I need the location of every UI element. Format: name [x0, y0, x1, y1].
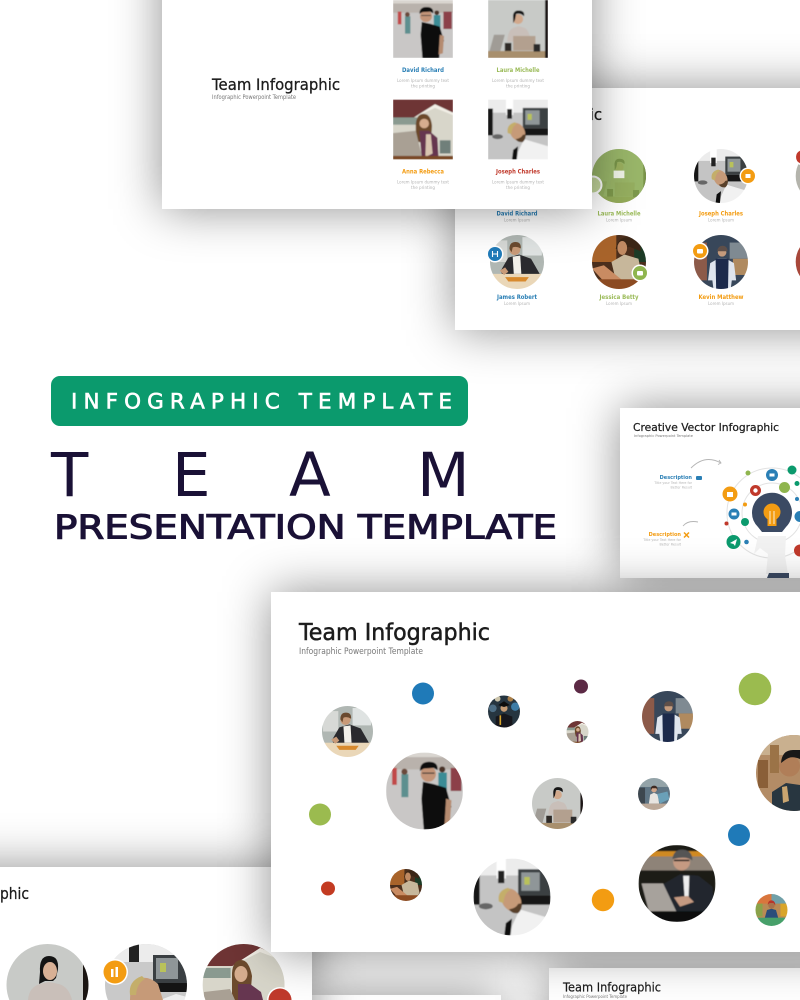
portrait: Anna — [203, 944, 285, 1000]
icon cluster — [722, 466, 800, 556]
dot: orange — [592, 889, 614, 911]
caption: Lorem Ipsum dummy text — [397, 180, 449, 186]
slide title: Creative Vector Infographic — [633, 421, 779, 434]
name: Laura Michelle: Laura Michelle — [496, 67, 540, 74]
slide background — [162, 0, 592, 209]
bubble: girl — [756, 894, 788, 926]
portrait: David — [490, 149, 544, 203]
hand holding bulb — [754, 536, 788, 574]
badge: green — [632, 264, 648, 282]
name: Jessica Betty: Jessica Betty — [599, 294, 638, 301]
bubble: Joseph — [474, 858, 550, 936]
caption: Lorem Ipsum — [708, 218, 734, 224]
bubble: small woman — [638, 778, 670, 810]
bubble: Jessica small — [390, 869, 422, 901]
slide subtitle: Infographic Powerpoint Template — [212, 95, 296, 101]
portrait: partial right top — [796, 161, 800, 191]
portrait: Joseph — [105, 944, 187, 1000]
bubble: businessman — [638, 845, 716, 922]
photo: David — [393, 0, 453, 58]
caption: Lorem Ipsum dummy text — [492, 180, 544, 186]
badge text: INFOGRAPHIC TEMPLATE — [71, 390, 452, 414]
dot: red — [321, 882, 335, 896]
badge: orange — [692, 242, 708, 260]
caption: the printing — [411, 84, 435, 90]
caption: Lorem Ipsum dummy text — [397, 78, 449, 84]
slide title: Team Infographic — [562, 980, 661, 994]
description: blue: Better Result — [670, 486, 693, 490]
slide background — [0, 867, 312, 1000]
arrow: lower curved — [683, 522, 698, 526]
bubble: Kevin — [642, 691, 693, 742]
slide background — [620, 408, 800, 578]
name: David Richard: David Richard — [496, 210, 538, 218]
caption: Lorem Ipsum — [504, 218, 530, 224]
dot: blue — [728, 824, 750, 846]
badge: red — [794, 149, 800, 165]
caption: the printing — [506, 84, 530, 90]
badge background — [51, 376, 468, 426]
caption: Lorem Ipsum — [606, 301, 632, 307]
portrait: Kevin — [694, 235, 748, 289]
bubble: Anna small — [566, 721, 588, 743]
caption: Lorem Ipsum — [504, 301, 530, 307]
name: Kevin Matthew: Kevin Matthew — [698, 294, 744, 301]
badge: orange — [740, 168, 756, 184]
caption: the printing — [411, 185, 435, 191]
badge: orange — [102, 959, 128, 985]
caption — [492, 180, 544, 191]
arrow: upper curved — [691, 459, 721, 468]
slide subtitle: Infographic Powerpoint Template — [634, 434, 694, 438]
description: orange: Description — [649, 532, 681, 538]
light bulb badge — [752, 493, 792, 532]
bubble: David — [386, 752, 463, 830]
dot: blue — [412, 682, 434, 704]
portrait: Laura — [6, 944, 89, 1000]
name: Joseph Charles: Joseph Charles — [698, 210, 743, 218]
sleeve — [767, 573, 789, 578]
name: Anna Rebecca: Anna Rebecca — [402, 168, 444, 176]
photo: Joseph — [488, 100, 548, 160]
portrait: Laura green tint — [592, 149, 646, 203]
name: Joseph Charles: Joseph Charles — [495, 168, 540, 176]
caption: Lorem Ipsum — [708, 301, 734, 307]
panel: bottom left slide — [0, 867, 312, 1000]
description: blue — [653, 475, 702, 490]
slide background — [271, 592, 800, 952]
name: Laura Michelle: Laura Michelle — [598, 210, 640, 218]
portrait: Joseph — [694, 149, 748, 203]
caption — [492, 78, 544, 90]
description: blue: Description — [660, 475, 692, 481]
caption: Lorem Ipsum dummy text — [492, 78, 544, 84]
bubble: James — [322, 706, 373, 757]
badge: red — [267, 987, 293, 1000]
dot: green — [309, 804, 331, 826]
portrait: partial right bottom — [796, 247, 800, 276]
name: David Richard: David Richard — [402, 67, 444, 74]
portrait: Jessica — [592, 235, 646, 289]
description: orange: Title your Text Here for — [642, 538, 682, 542]
panel: bottom centre slide — [312, 995, 501, 1000]
panel: creative vector infographic slide — [620, 408, 800, 578]
bubble: right man — [756, 735, 800, 811]
badge: green — [584, 176, 602, 194]
slide subtitle: Infographic Powerpoint Template — [299, 647, 423, 657]
description: orange: Better Result — [660, 542, 682, 546]
panel: main team bubble slide — [271, 592, 800, 952]
slide subtitle: Infographic Powerpoint Template — [563, 994, 627, 1000]
photo: Laura — [488, 0, 548, 58]
dot: large green — [739, 673, 771, 705]
panel: bottom right slide — [549, 968, 800, 1000]
caption: Lorem Ipsum — [606, 218, 632, 224]
orbit rings — [727, 468, 800, 558]
dot: plum — [574, 680, 588, 694]
portrait: James — [490, 235, 544, 289]
heading badge — [51, 376, 468, 426]
slide background — [549, 968, 800, 1000]
panel: team grid slide — [455, 88, 800, 330]
name: James Robert: James Robert — [496, 294, 537, 301]
bubble: Laura — [532, 778, 583, 829]
description: orange — [642, 532, 689, 546]
slide title: Team Infographic — [211, 75, 340, 94]
photo: Anna — [393, 100, 453, 160]
caption: the printing — [506, 185, 530, 191]
bubble: graduate — [488, 696, 520, 728]
heading: TEAM: TEAM — [50, 440, 470, 511]
caption — [397, 78, 449, 90]
panel: team profile slide — [162, 0, 592, 209]
heading: Presentation Template: PRESENTATION TEMPLATE — [54, 508, 557, 546]
slide title fragment: Team Infographic — [473, 105, 602, 124]
slide title fragment: phic — [0, 884, 29, 903]
slide background — [455, 88, 800, 330]
slide title: Team Infographic — [298, 620, 490, 646]
caption — [397, 180, 449, 191]
description: blue: Title your Text Here for — [653, 481, 693, 485]
badge: blue — [486, 246, 504, 262]
